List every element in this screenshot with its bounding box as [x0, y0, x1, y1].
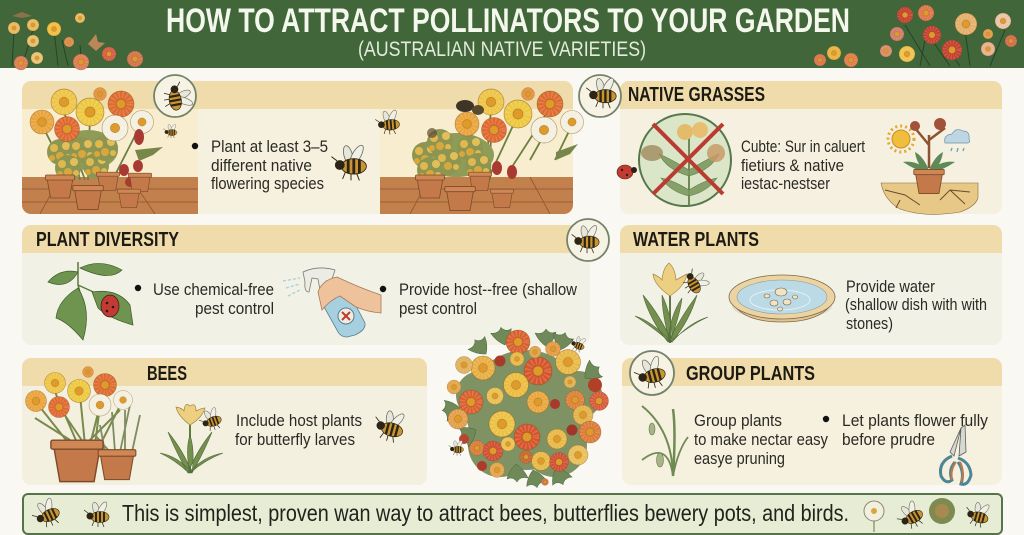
footer text: This is simplest, proven wan way to attract bees, butterflies bewery pots, and birds. — [122, 500, 849, 526]
header flowers right — [814, 5, 1017, 67]
text: native grasses: iestac-nestser — [741, 174, 830, 193]
icon: ladybug — [617, 165, 637, 179]
heading: PLANT DIVERSITY — [36, 229, 180, 251]
icon: small bee — [163, 124, 177, 138]
illustration: sun, rain and potted plant on cracked soil — [881, 118, 978, 214]
panel: plant diversity — [22, 219, 609, 345]
text: host plants: Include host plants — [236, 411, 362, 430]
icon: bee badge — [154, 75, 196, 117]
text: chemical-free pest control — [135, 280, 274, 318]
heading: NATIVE GRASSES — [628, 84, 765, 106]
text: native grasses: fietiurs & native — [741, 156, 844, 175]
panel: bees — [22, 358, 427, 485]
text: let plants flower: Let plants flower fully — [842, 411, 988, 430]
footer icons right — [864, 498, 992, 534]
text: plant at least: Plant at least 3–5 — [211, 137, 328, 156]
text: provide water: (shallow dish with with — [845, 295, 987, 314]
icon: bee badge — [579, 75, 621, 117]
text: group plants: easye pruning — [694, 449, 785, 468]
icon: pruning shears — [940, 425, 971, 484]
text: plant at least: different native — [211, 156, 312, 175]
icon: grass stems — [642, 406, 688, 476]
panel: native grasses — [579, 75, 1002, 214]
text: plant at least — [192, 137, 328, 193]
icon: shallow water dish with stones — [729, 275, 835, 322]
subtitle: (AUSTRALIAN NATIVE VARIETIES) — [358, 38, 646, 61]
illustration: right potted flowers — [412, 88, 584, 211]
icon: bee badge — [567, 219, 609, 261]
text: chemical-free pest control: pest control — [195, 299, 274, 318]
header banner — [0, 0, 1024, 70]
text: provide water: Provide water — [846, 277, 935, 296]
footer callout — [23, 494, 1002, 534]
text: native grasses — [741, 137, 865, 193]
panel: group plants — [622, 351, 1002, 485]
text: provide water: stones) — [846, 314, 893, 333]
title: HOW TO ATTRACT POLLINATORS TO YOUR GARDEN — [166, 2, 850, 40]
text: host-free pest control: Provide host--free (shallow — [399, 280, 578, 299]
header flowers left — [8, 12, 143, 70]
text: chemical-free pest control: Use chemical-free — [153, 280, 274, 299]
heading: WATER PLANTS — [633, 229, 759, 251]
text: provide water — [845, 277, 987, 333]
panel: water plants — [620, 225, 1002, 345]
illustration: potted flowers and grass — [26, 366, 140, 482]
icon: bumblebee — [331, 143, 366, 180]
panel: plant at least 3-5 species — [22, 75, 584, 214]
illustration: central flower bouquet — [441, 326, 608, 489]
icon: crossed-out plant — [639, 114, 731, 206]
text: let plants flower — [823, 411, 988, 449]
icon: flying bee — [374, 108, 400, 136]
text: host-free pest control — [380, 280, 578, 318]
text: native grasses: Cubte: Sur in caluert — [741, 137, 865, 156]
text: group plants: to make nectar easy — [694, 430, 828, 449]
heading: GROUP PLANTS — [686, 363, 815, 385]
footer icons left — [28, 495, 109, 532]
illustration: left potted flowers — [30, 88, 163, 210]
icon: lily with bee — [160, 404, 224, 473]
text: host plants — [235, 411, 362, 449]
text: group plants: Group plants — [694, 411, 782, 430]
text: host plants: for butterfly larves — [235, 430, 355, 449]
text: host-free pest control: pest control — [399, 299, 477, 318]
icon: bee badge — [630, 351, 674, 395]
text: group plants — [694, 411, 828, 468]
icon: lily plant with bee — [635, 263, 712, 343]
icon: bumblebee — [370, 406, 408, 444]
text: plant at least: flowering species — [211, 174, 324, 193]
text: let plants flower: before prudre — [842, 430, 935, 449]
icon: spray bottle in hand — [283, 268, 381, 337]
icon: leaf with ladybug — [48, 262, 133, 340]
heading: BEES — [147, 363, 187, 385]
